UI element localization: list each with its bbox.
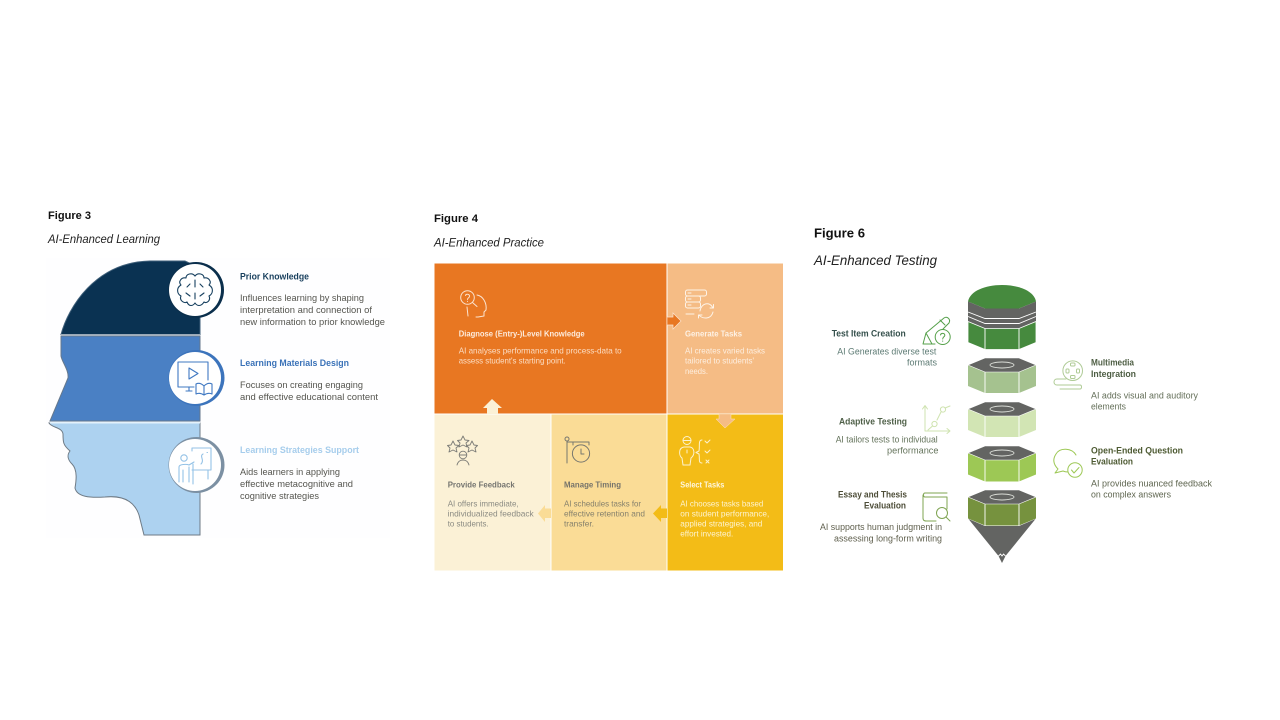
- cell: Select Tasks: on student performance,: [680, 509, 769, 518]
- icon: book with magnifier: [923, 493, 950, 521]
- text block: Learning Strategies Support: cognitive strategies: [240, 491, 319, 501]
- text block: Open-Ended Question Evaluation: [1091, 445, 1212, 500]
- arrow: select to timing: [653, 505, 667, 522]
- text block: Open-Ended Question Evaluation: Evaluation: [1091, 457, 1133, 467]
- cell: Provide Feedback: Provide Feedback: [448, 480, 515, 490]
- cell: Manage Timing: AI schedules tasks for: [564, 499, 641, 508]
- text block: Adaptive Testing: [836, 416, 938, 456]
- cell: Select Tasks: Select Tasks: [680, 480, 725, 490]
- icon: video lesson badge: [168, 350, 224, 406]
- cell: Generate Tasks: Generate Tasks: [685, 329, 742, 339]
- text block: Essay and Thesis Evaluation: [820, 490, 942, 544]
- cell: Manage Timing: Manage Timing: [564, 480, 621, 490]
- heading: Figure 4: Figure 4: [434, 213, 479, 225]
- icon: hanging clock: [565, 437, 590, 463]
- cell: Diagnose (Entry-)Level Knowledge: Diagnose (Entry-)Level Knowledge: [459, 329, 585, 339]
- text block: Prior Knowledge: Prior Knowledge: [240, 272, 309, 282]
- cell: Manage Timing: [552, 414, 666, 570]
- arrow: timing to feedback: [538, 505, 551, 522]
- stack: essay segment: [968, 490, 1036, 526]
- text block: Adaptive Testing: performance: [887, 446, 938, 456]
- heading: Figure 3: Figure 3: [48, 210, 91, 222]
- text block: Prior Knowledge: [240, 272, 385, 327]
- icon: teacher at board badge: [168, 437, 224, 493]
- text block: Test Item Creation: [832, 328, 937, 368]
- icon: speech bubble with check: [1054, 449, 1082, 477]
- text block: Learning Strategies Support: Aids learners in applying: [240, 467, 340, 477]
- text block: Essay and Thesis Evaluation: Evaluation: [864, 501, 906, 511]
- arrow: generate to select: [716, 414, 735, 428]
- cell: Generate Tasks: [668, 264, 783, 414]
- head section: blue middle: [50, 336, 200, 421]
- text block: Learning Strategies Support: [240, 445, 360, 501]
- icon: task stack with refresh: [686, 290, 714, 318]
- subheading: AI-Enhanced Testing: AI-Enhanced Testing: [813, 253, 937, 268]
- text block: Multimedia Integration: Multimedia: [1091, 358, 1135, 368]
- text block: Essay and Thesis Evaluation: Essay and Thesis: [838, 490, 907, 500]
- text block: Open-Ended Question Evaluation: on complex answers: [1091, 490, 1171, 500]
- heading: Figure 6: Figure 6: [814, 225, 865, 240]
- cell: Select Tasks: applied strategies, and: [680, 519, 763, 528]
- icon: brain badge: [168, 262, 224, 318]
- icon: head with question mark: [461, 291, 486, 317]
- cell: Diagnose (Entry-)Level Knowledge: [434, 264, 666, 414]
- subheading: AI-Enhanced Practice: AI-Enhanced Practice: [433, 238, 544, 250]
- cell: Diagnose (Entry-)Level Knowledge: AI analyses performance and process-data to: [459, 347, 622, 356]
- head diagram: [46, 258, 390, 538]
- icon: person choosing tasks: [680, 436, 710, 465]
- text block: Learning Materials Design: [240, 358, 378, 402]
- text block: Multimedia Integration: AI adds visual and auditory: [1091, 390, 1198, 400]
- text block: Test Item Creation: formats: [907, 358, 937, 368]
- text block: Prior Knowledge: new information to prior knowledge: [240, 317, 385, 327]
- panel: Figure 6 AI-Enhanced Testing: [813, 225, 1212, 563]
- cell: Select Tasks: [668, 414, 783, 570]
- cell: Select Tasks: AI chooses tasks based: [680, 499, 764, 508]
- text block: Multimedia Integration: elements: [1091, 402, 1126, 412]
- stack: open-ended segment: [968, 446, 1036, 482]
- text block: Prior Knowledge: interpretation and connection of: [240, 305, 372, 315]
- stack: pencil tip: [968, 519, 1036, 563]
- icon: person with star ratings: [448, 436, 478, 465]
- text block: Learning Materials Design: Focuses on creating engaging: [240, 380, 363, 390]
- stack: adaptive segment: [968, 402, 1036, 437]
- text block: Learning Strategies Support: effective metacognitive and: [240, 479, 353, 489]
- icon: pencil with question mark: [923, 317, 950, 344]
- head section: dark crown: [61, 261, 200, 334]
- text block: Essay and Thesis Evaluation: assessing long-form writing: [834, 534, 942, 544]
- stack: multimedia segment: [968, 358, 1036, 393]
- subheading: AI-Enhanced Learning: AI-Enhanced Learning: [47, 234, 161, 246]
- text block: Multimedia Integration: Integration: [1091, 369, 1136, 379]
- arrow: feedback to diagnose: [483, 399, 502, 414]
- text block: Test Item Creation: Test Item Creation: [832, 328, 906, 338]
- text block: Multimedia Integration: [1091, 358, 1198, 412]
- text block: Prior Knowledge: Influences learning by shaping: [240, 293, 364, 303]
- cell: Provide Feedback: AI offers immediate,: [448, 499, 519, 508]
- cell: Generate Tasks: AI creates varied tasks: [685, 347, 765, 356]
- cell: Manage Timing: effective retention and: [564, 509, 645, 518]
- icon: rising line chart: [922, 406, 950, 434]
- arrow: diagnose to generate: [667, 313, 681, 329]
- cell: Select Tasks: effort invested.: [680, 529, 733, 538]
- text block: Test Item Creation: AI Generates diverse test: [837, 346, 937, 356]
- text block: Open-Ended Question Evaluation: Open-Ended Question: [1091, 445, 1183, 455]
- text block: Learning Materials Design: and effective educational content: [240, 392, 378, 402]
- text block: Essay and Thesis Evaluation: AI supports human judgment in: [820, 522, 942, 532]
- pencil stack diagram: [968, 285, 1036, 563]
- cell: Diagnose (Entry-)Level Knowledge: assess student's starting point.: [459, 357, 566, 366]
- icon: film reel: [1054, 361, 1082, 389]
- panel: Figure 4 AI-Enhanced Practice: [433, 213, 783, 570]
- cell: Manage Timing: transfer.: [564, 519, 594, 528]
- cell: Provide Feedback: [434, 414, 550, 570]
- cell: Generate Tasks: needs.: [685, 367, 708, 376]
- text block: Open-Ended Question Evaluation: AI provides nuanced feedback: [1091, 478, 1212, 488]
- text block: Adaptive Testing: AI tailors tests to individual: [836, 434, 938, 444]
- stack: eraser cap: [968, 285, 1036, 350]
- text block: Adaptive Testing: Adaptive Testing: [839, 416, 907, 426]
- head section: light blue face: [49, 423, 200, 535]
- cell: Provide Feedback: to students.: [448, 519, 489, 528]
- panel: Figure 3 AI-Enhanced Learning: [46, 210, 390, 538]
- text block: Learning Materials Design: Learning Materials Design: [240, 358, 349, 369]
- cell: Generate Tasks: tailored to students': [685, 357, 754, 366]
- text block: Learning Strategies Support: Learning Strategies Support: [240, 445, 360, 456]
- cell: Provide Feedback: individualized feedback: [448, 509, 535, 518]
